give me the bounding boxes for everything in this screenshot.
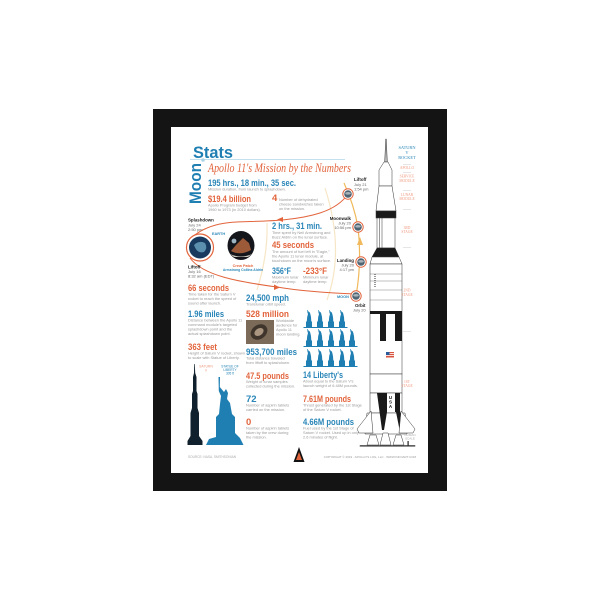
timeline labels: 10:56 pm: [334, 225, 352, 230]
stat: total distance: from liftoff to splashdown.: [246, 360, 290, 365]
stat: lunar samples: 47.5 pounds: [246, 371, 289, 382]
earth: [186, 232, 225, 261]
stat: rocket height: 363 feet: [188, 342, 218, 353]
stat: sandwiches: 4: [272, 193, 278, 204]
copyright: COPYRIGHT © 2019 · APOLLO'S LOG, LLC · WWW.INFOART.COM: [324, 455, 416, 459]
stat: program budget: 1960 to 1973 (in 2010 dollars).: [208, 207, 261, 212]
stat: liberty weight: launch weight of 6.48M pounds.: [303, 383, 358, 388]
stat: aspirin carried: carried on the mission.: [246, 407, 285, 412]
timeline labels: 1:54 pm: [354, 186, 369, 192]
stat: aspirin taken: 0: [246, 417, 251, 428]
title: Moon: [186, 163, 205, 204]
stat: liberty weight: 14 Liberty's: [303, 370, 343, 381]
stat: rocket height: to scale with Statue of Liberty.: [188, 355, 240, 360]
scale comparison: statue of liberty: [206, 364, 244, 445]
timeline labels: Liftoff: [188, 264, 201, 270]
stat: lunar samples: collected during the mission.: [246, 384, 295, 388]
rocket part labels: SCALE: [405, 436, 415, 440]
stat: fuel left: [272, 240, 331, 263]
stat: aspirin taken: Number of aspirin tablets: [246, 426, 289, 430]
rocket heading: ROCKET: [398, 155, 416, 160]
scale comparison: statue of liberty: LIBERTY: [223, 368, 237, 372]
stat: fuel left: touchdown on the moon's surface.: [272, 258, 331, 263]
stat: rocket height: [188, 342, 245, 360]
stat: audience with footprint photo: 528 million: [246, 309, 289, 320]
stat: splashdown distance: [188, 309, 242, 336]
rocket USA lettering: A: [389, 404, 393, 409]
title: [186, 143, 351, 204]
stat: audience with footprint photo: [246, 309, 300, 344]
timeline labels: MOON: [337, 295, 349, 299]
timeline labels: July 20: [353, 308, 366, 312]
stat: speed of sound: sound after launch.: [188, 300, 221, 306]
stat: liberty weight: [303, 370, 358, 388]
rocket USA lettering: U: [389, 395, 392, 400]
mission path: [187, 183, 363, 296]
stat: fuel used: Fuel used by the 1st Stage of: [303, 426, 355, 430]
statue grid: [304, 310, 358, 367]
picture frame: [153, 109, 447, 491]
timeline labels: Splashdown: [188, 218, 214, 222]
stat: splashdown distance: Distance between the Apollo 11: [188, 318, 242, 322]
logo: [294, 447, 304, 462]
stat: audience with footprint photo: Worldwide: [276, 318, 294, 323]
rocket heading: [398, 145, 416, 160]
timeline labels: [188, 177, 369, 312]
stat: fuel used: 4.66M pounds: [303, 417, 354, 428]
rocket part labels: SERVICE: [400, 174, 415, 178]
stat: fuel used: [303, 417, 359, 440]
stat: fuel left: 45 seconds: [272, 240, 314, 251]
timeline labels: Landing: [337, 258, 354, 263]
stat: mission duration: [208, 178, 296, 192]
moon markers: [343, 189, 366, 301]
timeline labels: July 21: [354, 182, 367, 187]
stat: translunar speed: Translunar orbit speed.: [246, 302, 286, 306]
stat: max temp: daytime temp.: [272, 279, 296, 284]
timeline labels: 2:50 pm: [188, 227, 203, 232]
title: Stats: [193, 143, 233, 162]
timeline labels: July 16: [188, 269, 201, 274]
stat: total distance: 953,700 miles: [246, 347, 297, 358]
stat: thrust: [303, 394, 362, 412]
stat: program budget: Apollo Program budget from: [208, 202, 257, 208]
stat: aspirin carried: Number of aspirin tablets: [246, 402, 289, 408]
timeline labels: 8:32 am (EDT): [188, 274, 215, 278]
stat: splashdown distance: actual splashdown point.: [188, 331, 231, 336]
rocket USA lettering: S: [389, 400, 392, 404]
stat: aspirin carried: [246, 394, 289, 412]
rocket part labels: STAGE: [401, 293, 413, 297]
stat: lunar surface time: Buzz Aldrin on the lunar surface.: [272, 234, 328, 240]
stat: audience with footprint photo: Apollo 11: [276, 327, 292, 332]
rocket part labels: APOLLO: [400, 166, 414, 170]
stat: translunar speed: 24,500 mph: [246, 293, 289, 304]
faint orbit arcs: [257, 188, 336, 300]
stat: total distance: Total distance traveled: [246, 356, 285, 360]
stat: min temp: daytime temp.: [303, 279, 327, 284]
stat: lunar surface time: 2 hrs., 31 min.: [272, 221, 322, 232]
scale comparison: rocket silhouette: [188, 364, 213, 445]
rocket part labels: 1ST: [404, 380, 411, 384]
stat: fuel left: the Apollo 11 lunar module, at: [272, 254, 324, 258]
rocket part labels: 2ND: [404, 288, 411, 292]
stat: sandwiches: [272, 193, 324, 211]
stat: sandwiches: on the mission.: [279, 206, 305, 211]
rocket heading: V: [405, 150, 409, 155]
rocket part labels: [399, 166, 416, 440]
stat: thrust: Thrust generated by the 1st Stage: [303, 402, 362, 408]
stat: aspirin taken: the mission.: [246, 434, 267, 440]
stat: rocket height: Height of Saturn V rocket, shown: [188, 350, 245, 356]
stat: thrust: 7.61M pounds: [303, 394, 351, 405]
crew patch: Armstrong Collins Aldrin: [223, 268, 263, 272]
rocket part labels: STAGE: [401, 384, 413, 388]
stat: speed of sound: [188, 283, 237, 306]
stat: lunar samples: [246, 371, 295, 388]
stat: min temp: -233°F: [303, 266, 327, 277]
rocket heading: SATURN: [398, 145, 416, 150]
rocket flag: [386, 352, 394, 358]
stat: min temp: [303, 266, 329, 284]
scale comparison: statue of liberty: 305 ft: [226, 372, 234, 376]
stat: audience with footprint photo: audience for: [276, 322, 298, 328]
stat: min temp: Minimum lunar: [303, 274, 329, 280]
stat: max temp: [272, 266, 299, 284]
rocket diagram: [357, 139, 415, 446]
timeline labels: Liftoff: [354, 177, 367, 182]
stat: max temp: Maximum lunar: [272, 274, 299, 280]
scale comparison: rocket silhouette: SATURN: [199, 364, 213, 368]
stat: sandwiches: cheese sandwiches taken: [279, 202, 324, 206]
rocket part labels: 3RD: [404, 226, 411, 230]
stat: speed of sound: rocket to reach the speed of: [188, 296, 237, 301]
stat: audience with footprint photo: moon landing.: [276, 332, 300, 336]
stat: speed of sound: Time taken for the Saturn V: [188, 292, 236, 296]
rocket part labels: STAGE: [401, 230, 413, 234]
rocket part labels: MODULE: [399, 197, 415, 201]
stat: mission duration: Mission duration, from launch to splashdown.: [208, 186, 286, 192]
stat: mission duration: 195 hrs., 18 min., 35 sec.: [208, 178, 296, 189]
stat: speed of sound: 66 seconds: [188, 283, 229, 294]
stat: fuel used: 2.6 minutes of flight.: [303, 434, 338, 440]
timeline labels: July 20: [338, 220, 352, 226]
stat: aspirin carried: 72: [246, 394, 257, 405]
crew patch: [223, 231, 263, 272]
stat: program budget: $19.4 billion: [208, 194, 251, 205]
scale comparison: rocket silhouette: V: [205, 368, 208, 372]
stat: splashdown distance: splashdown point and the: [188, 326, 232, 332]
crew patch: Crew Patch: [233, 264, 254, 268]
earth: EARTH: [212, 232, 225, 236]
timeline labels: 4:17 pm: [340, 267, 355, 272]
stat: sandwiches: Number of dehydrated: [279, 197, 318, 202]
timeline labels: Moonwalk: [330, 216, 352, 221]
rocket part labels: LUNAR: [401, 193, 414, 197]
timeline labels: July 24: [188, 222, 201, 228]
rocket part labels: MODULE: [399, 179, 415, 183]
stat: fuel used: Saturn V rocket. Used up in only: [303, 430, 359, 435]
timeline labels: July 20: [341, 262, 355, 268]
stat: program budget: [208, 194, 261, 212]
rocket part labels: HUMAN: [404, 433, 416, 437]
stat: lunar surface time: [272, 221, 330, 240]
stat: splashdown distance: command module's targeted: [188, 322, 237, 327]
stat: aspirin taken: taken by the crew during: [246, 430, 288, 435]
title: Apollo 11's Mission by the Numbers: [207, 161, 351, 175]
stat: max temp: 356°F: [272, 266, 291, 277]
stat: liberty weight: About equal to the Saturn V's: [303, 378, 354, 384]
stat: total distance: [246, 347, 297, 365]
stat: lunar surface time: Time spent by Neil Armstrong and: [272, 230, 330, 235]
stat: aspirin taken: [246, 417, 289, 440]
timeline labels: Orbit: [355, 303, 366, 308]
stat: thrust: of the Saturn V rocket.: [303, 407, 342, 412]
stat: fuel left: The amount of fuel left in "Eagle,": [272, 249, 330, 254]
stat: lunar samples: Weight of lunar samples: [246, 379, 288, 384]
stat: splashdown distance: 1.96 miles: [188, 309, 224, 320]
source note: SOURCE: NASA, SMITHSONIAN: [188, 455, 237, 459]
scale comparison: statue of liberty: STATUE OF: [221, 364, 239, 368]
